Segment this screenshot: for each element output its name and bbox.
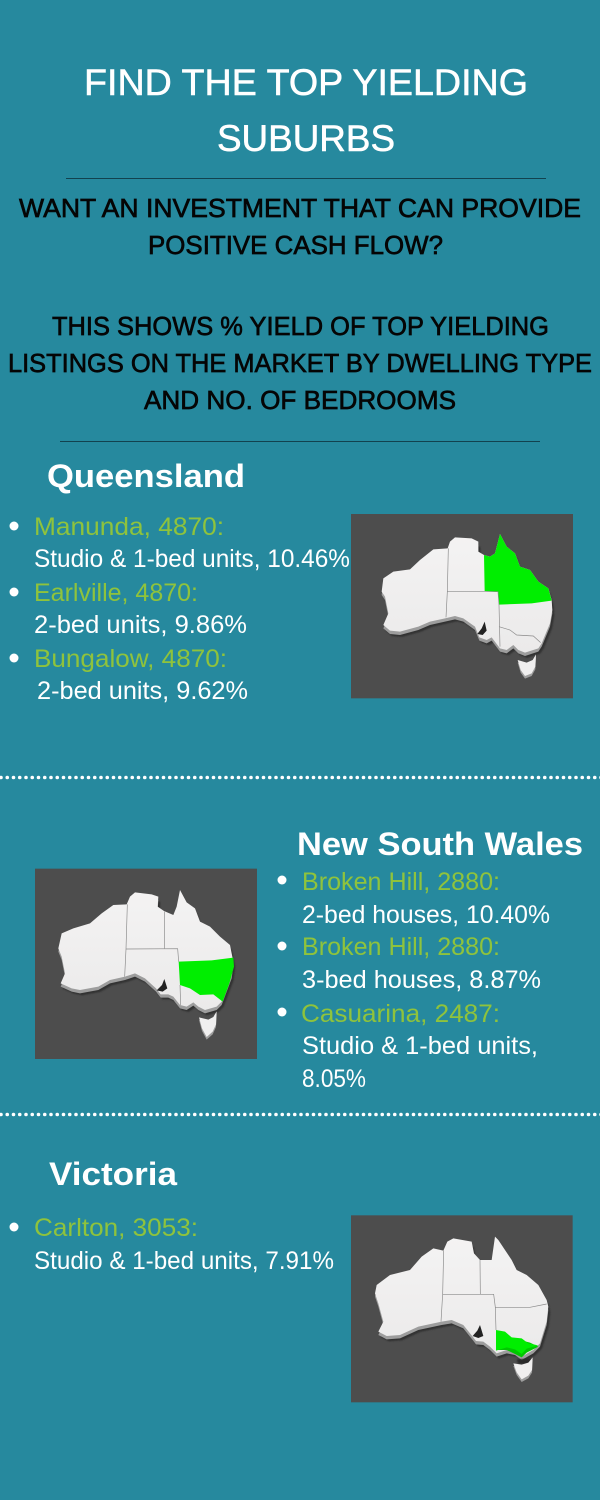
divider: dotted — [1, 776, 600, 779]
map: Victoria highlighted — [351, 1215, 573, 1402]
list: Queensland suburbs: 2-bed units, 9.86% — [34, 611, 247, 639]
list: Victoria suburbs: Carlton, 3053: — [34, 1214, 198, 1242]
list: New South Wales suburbs — [278, 868, 550, 1093]
list: New South Wales suburbs: 3-bed houses, 8.87% — [302, 966, 541, 994]
explanation text — [8, 313, 592, 415]
intro question — [19, 195, 581, 260]
explanation text: THIS SHOWS % YIELD OF TOP YIELDING — [52, 313, 549, 341]
panel: Queensland — [10, 458, 573, 705]
list: New South Wales suburbs: Studio & 1-bed units, — [302, 1032, 538, 1060]
list: Queensland suburbs: Manunda, 4870: — [34, 513, 224, 541]
list: Queensland suburbs: Studio & 1-bed units, 10.46% — [34, 545, 350, 573]
heading: Victoria: Victoria — [49, 1156, 177, 1192]
explanation text: AND NO. OF BEDROOMS — [144, 387, 456, 415]
list: Victoria suburbs: Studio & 1-bed units, 7.91% — [34, 1247, 334, 1275]
intro question: WANT AN INVESTMENT THAT CAN PROVIDE — [19, 195, 581, 223]
divider: dotted — [1, 1113, 600, 1116]
list: Queensland suburbs: Earlville, 4870: — [34, 579, 198, 607]
map: Queensland highlighted — [351, 514, 573, 698]
list: New South Wales suburbs: Casuarina, 2487: — [301, 1000, 500, 1028]
list: Queensland suburbs: 2-bed units, 9.62% — [37, 677, 248, 705]
heading: New South Wales: New South Wales — [297, 826, 583, 862]
title — [84, 61, 528, 159]
list: Queensland suburbs — [10, 513, 350, 705]
list: New South Wales suburbs: Broken Hill, 2880: — [302, 868, 500, 896]
heading: Queensland: Queensland — [47, 458, 245, 494]
list: Queensland suburbs: Bungalow, 4870: — [34, 645, 227, 673]
panel: Victoria — [10, 1156, 573, 1402]
title: FIND THE TOP YIELDING — [84, 61, 528, 103]
list: New South Wales suburbs: 2-bed houses, 10.40% — [302, 901, 550, 929]
list: Victoria suburbs — [10, 1214, 334, 1275]
list: New South Wales suburbs: 8.05% — [302, 1065, 366, 1093]
intro question: POSITIVE CASH FLOW? — [148, 232, 443, 260]
panel: New South Wales — [35, 826, 583, 1093]
title: SUBURBS — [217, 117, 395, 159]
explanation text: LISTINGS ON THE MARKET BY DWELLING TYPE — [8, 350, 592, 378]
map: New South Wales highlighted — [35, 869, 257, 1059]
list: New South Wales suburbs: Broken Hill, 2880: — [302, 933, 500, 961]
